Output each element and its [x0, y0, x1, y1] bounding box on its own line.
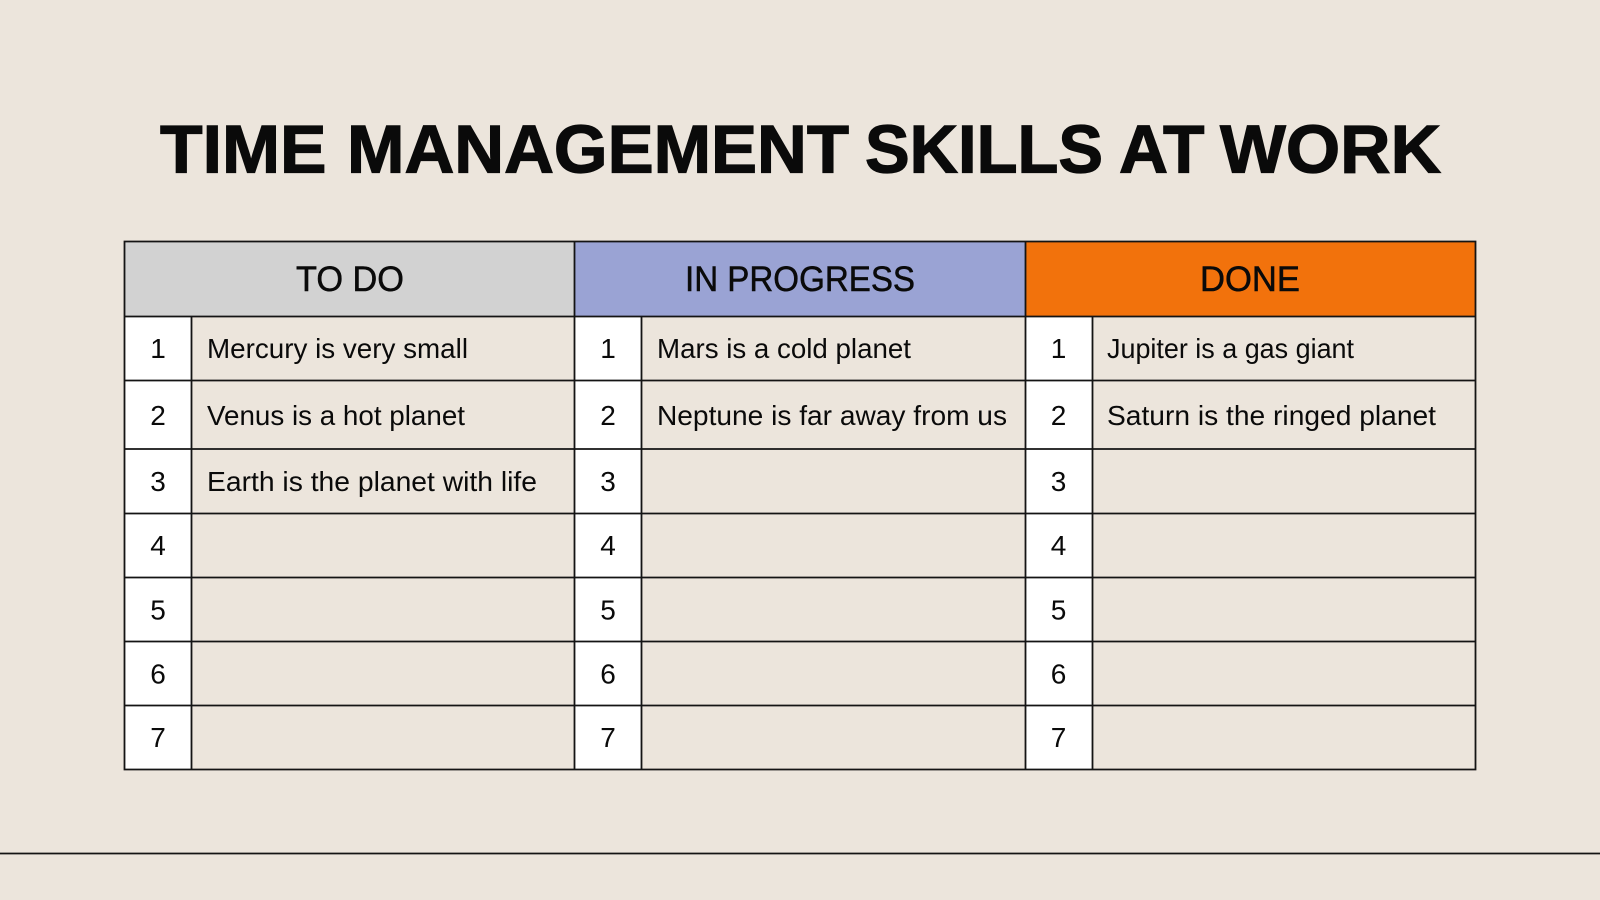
tasks: done: Saturn is the ringed planet [1107, 400, 1436, 431]
number cells: done: 3 [1051, 466, 1066, 497]
number cells: to do: 1 [150, 333, 166, 364]
number cells: in progress: 2 [600, 400, 616, 431]
title: WORK [1220, 112, 1441, 188]
column: done [1026, 242, 1476, 770]
number cells: to do: 5 [150, 594, 166, 626]
title: SKILLS [865, 112, 1103, 188]
number cells: in progress: 7 [600, 722, 616, 753]
header: to do: TO DO [296, 260, 404, 299]
number cells: done: 2 [1051, 400, 1066, 431]
number cells: to do: 3 [150, 466, 166, 497]
tasks: in progress: Mars is a cold planet [657, 333, 911, 364]
header: to do [124, 242, 574, 316]
tasks: done [1107, 333, 1436, 431]
number cells: in progress [574, 316, 642, 770]
tasks: to do [207, 333, 537, 497]
number cells: done [1026, 316, 1092, 770]
column: to do [124, 242, 574, 770]
number cells: done: 7 [1051, 722, 1066, 753]
title: AT [1119, 112, 1204, 188]
number cells: to do [124, 316, 192, 770]
number cells: in progress: 1 [600, 333, 616, 364]
number cells: done: 5 [1051, 594, 1066, 626]
number cells: to do: 4 [150, 530, 166, 561]
tasks: in progress [657, 333, 1007, 431]
title [160, 112, 1441, 188]
tasks: to do: Earth is the planet with life [207, 466, 537, 497]
column: in progress [574, 242, 1026, 770]
number cells: done: 4 [1051, 530, 1066, 561]
number cells: to do: 2 [150, 400, 166, 431]
number cells: in progress: 5 [600, 594, 616, 626]
number cells: done: 1 [1051, 333, 1066, 364]
header: in progress: IN PROGRESS [685, 260, 915, 299]
title: MANAGEMENT [347, 112, 849, 188]
number cells: to do: 6 [150, 658, 166, 690]
tasks: to do: Venus is a hot planet [207, 400, 465, 431]
tasks: to do: Mercury is very small [207, 333, 468, 364]
header: done: DONE [1200, 260, 1300, 299]
number cells: done: 6 [1051, 658, 1066, 690]
header: in progress [574, 242, 1026, 316]
number cells: in progress: 4 [600, 530, 616, 561]
number cells: to do: 7 [150, 722, 166, 753]
header: done [1026, 242, 1476, 316]
task board table [124, 242, 1476, 770]
number cells: in progress: 6 [600, 658, 616, 690]
tasks: in progress: Neptune is far away from us [657, 400, 1007, 431]
tasks: done: Jupiter is a gas giant [1107, 333, 1354, 364]
number cells: in progress: 3 [600, 466, 616, 497]
title: TIME [160, 112, 326, 188]
